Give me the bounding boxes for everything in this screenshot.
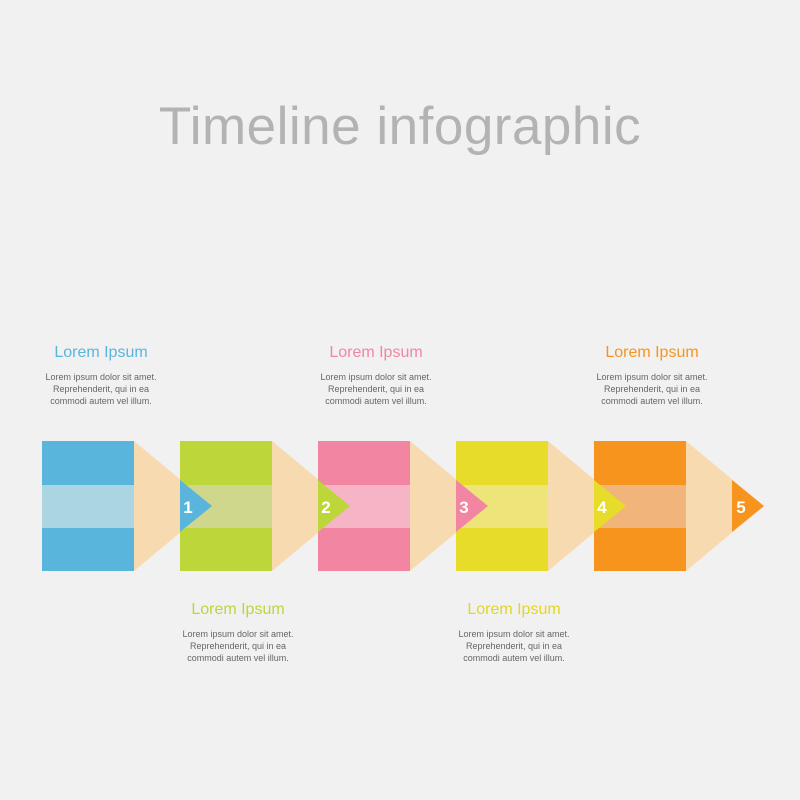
text block 2 [182,601,294,663]
tip 1: 1 [183,498,193,517]
tip 2 [318,480,350,532]
text block 5: Reprehenderit, qui in ea [604,384,700,394]
title: Timeline infographic [159,97,641,156]
text block 1: Lorem ipsum dolor sit amet. [45,372,157,382]
text block 5: commodi autem vel illum. [601,396,703,406]
text block 3: commodi autem vel illum. [325,396,427,406]
text block 3 [320,344,432,406]
text block 3: Reprehenderit, qui in ea [328,384,424,394]
pencil 3 [318,441,488,571]
pencil 5 [594,441,764,571]
text block 3: Lorem ipsum dolor sit amet. [320,372,432,382]
text block 2: Lorem ipsum dolor sit amet. [182,629,294,639]
text block 5 [596,344,708,406]
tip 4: 4 [597,498,607,517]
text block 4: Lorem ipsum dolor sit amet. [458,629,570,639]
text block 4: commodi autem vel illum. [463,653,565,663]
text block 1: Reprehenderit, qui in ea [53,384,149,394]
text block 2: Reprehenderit, qui in ea [190,641,286,651]
pencil 1 [42,441,212,571]
text block 4: Lorem Ipsum [467,601,561,618]
pencil 2 [180,441,350,571]
text block 4 [458,601,570,663]
tip 3 [456,480,488,532]
tip 4 [594,480,626,532]
pencil 4 [456,441,626,571]
text block 1 [45,344,157,406]
tip 1 [180,480,212,532]
tip 5: 5 [736,498,746,517]
text block 4: Reprehenderit, qui in ea [466,641,562,651]
text block 1: commodi autem vel illum. [50,396,152,406]
tip 5 [732,480,764,532]
tip 3: 3 [459,498,469,517]
text block 1: Lorem Ipsum [54,344,148,361]
tip 2: 2 [321,498,331,517]
text block 3: Lorem Ipsum [329,344,423,361]
text block 5: Lorem ipsum dolor sit amet. [596,372,708,382]
text block 2: Lorem Ipsum [191,601,285,618]
text block 5: Lorem Ipsum [605,344,699,361]
text block 2: commodi autem vel illum. [187,653,289,663]
